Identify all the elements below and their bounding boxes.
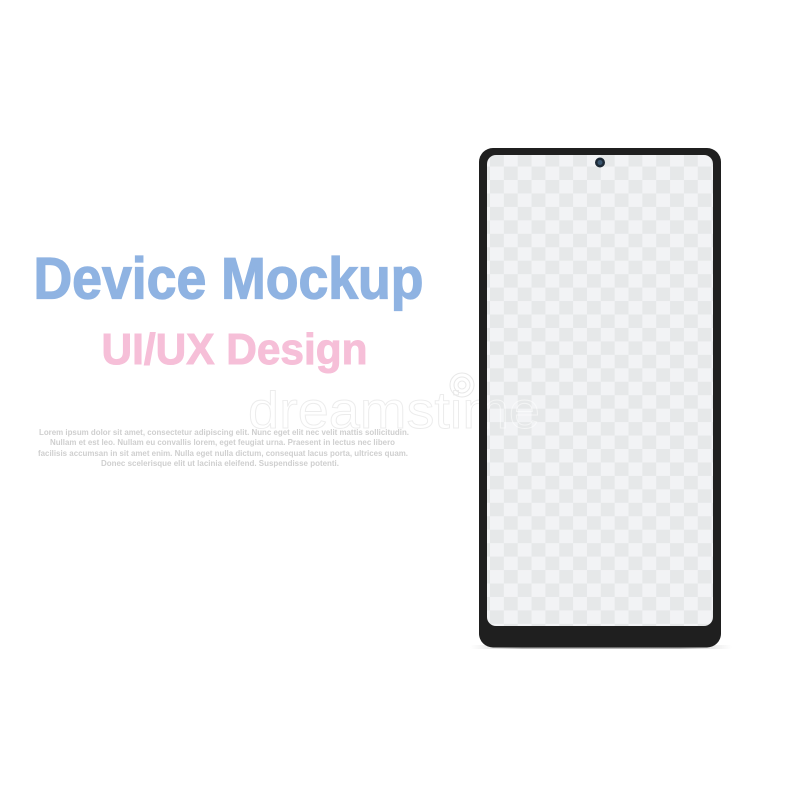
subtitle: UI/UX Design	[102, 325, 368, 374]
watermark over screen: dreamstime	[248, 382, 540, 440]
body text block	[38, 427, 409, 468]
body text block: Nullam et est leo. Nullam eu convallis lorem, eget feugiat urna. Praesent in lectus nec libero	[50, 437, 395, 447]
phone mockup	[479, 148, 721, 648]
body text block: Lorem ipsum dolor sit amet, consectetur adipiscing elit. Nunc eget elit nec velit mattis sollicitudin.	[39, 427, 409, 437]
title: Device Mockup	[34, 246, 424, 312]
watermark spiral	[450, 373, 474, 397]
body text block: Donec scelerisque elit ut lacinia eleifend. Suspendisse potenti.	[101, 458, 339, 468]
watermark wordmark: dreamstime	[248, 382, 540, 440]
phone shadow	[470, 645, 732, 649]
body text block: facilisis accumsan in sit amet enim. Nulla eget nulla dictum, consequat lacus porta, ultrices quam.	[38, 448, 408, 458]
front camera	[595, 158, 605, 168]
phone body	[479, 148, 721, 648]
transparent checker screen	[487, 155, 713, 626]
